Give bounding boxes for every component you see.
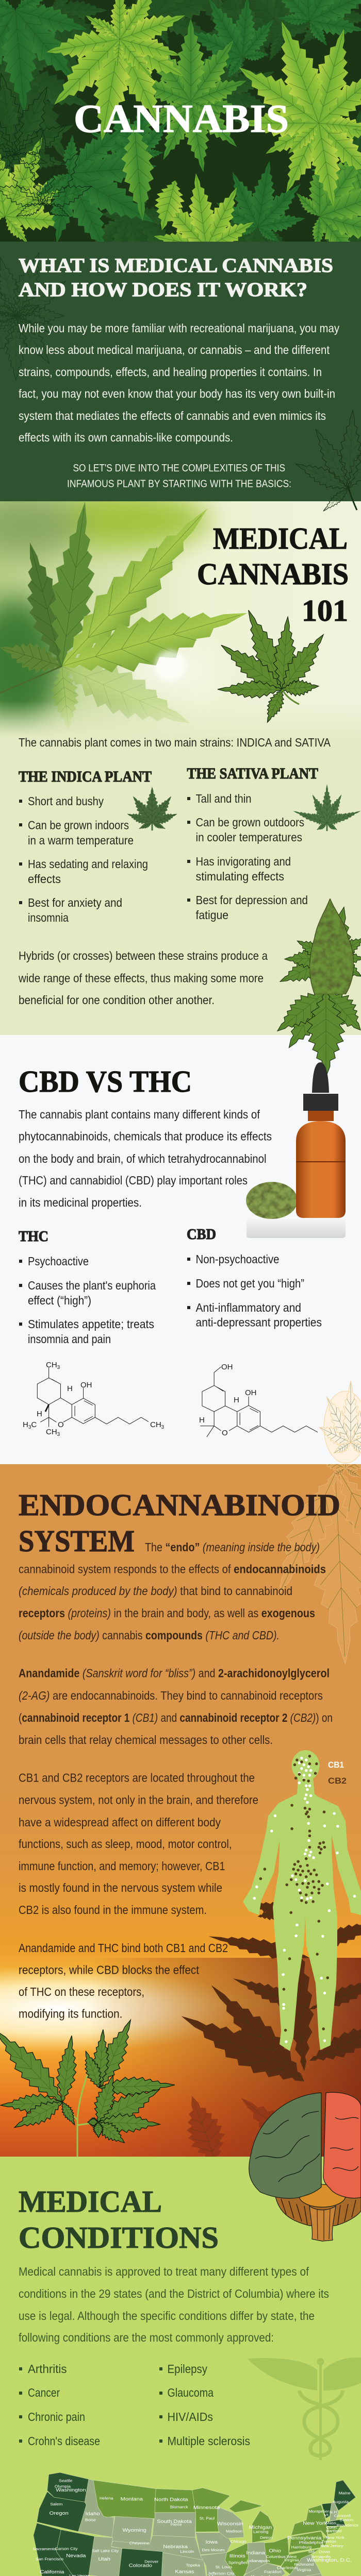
labels: state and city names: Seattle: [59, 2479, 72, 2483]
labels: state and city names: Michigan: [249, 2525, 272, 2530]
panel: hero photo of cannabis leaves: [0, 0, 361, 242]
labels: state and city names: Wyoming: [123, 2528, 146, 2533]
labels: state and city names: Vt.: [324, 2513, 330, 2517]
panel: endocannabinoid system: [0, 1417, 361, 2176]
list: sativa traits: [187, 792, 308, 922]
heading: CBD vs THC: CBD VS THC: [19, 1064, 192, 1098]
image: plant silhouette at sunset: [182, 1902, 361, 2081]
text: two main strains: The cannabis plant comes in two main strains: INDICA and SATIVA: [19, 736, 331, 749]
labels: state and city names: Des Moines: [202, 2548, 225, 2552]
list: common conditions: Cancer: [28, 2386, 60, 2399]
chart: THC molecule: CH: [46, 1361, 57, 1369]
labels: state and city names: Helena: [100, 2496, 113, 2500]
icon: pale bud sketch: [317, 1381, 361, 1463]
labels: state and city names: [32, 2479, 358, 2576]
text block: receptor locations: CB1 and CB2 receptors are located throughout the: [19, 1771, 255, 1785]
labels: state and city names: Montpelier: [309, 2509, 329, 2514]
text block: approved conditions: conditions in the 29 states (and the District of Columbia) where its: [19, 2287, 329, 2300]
list: THC effects: insomnia and pain: [28, 1332, 111, 1346]
labels: state and city names: Boise: [85, 2518, 96, 2522]
chart: THC molecule: CH: [150, 1420, 161, 1429]
panel: medical conditions: [0, 2092, 361, 2576]
labels: state and city names: Harrisburg: [291, 2545, 311, 2549]
text block: phytocannabinoids: in its medicinal properties.: [19, 1196, 142, 1209]
chart: CBD molecule: [199, 1363, 318, 1437]
labels: state and city names: Oregon: [50, 2511, 69, 2516]
text block: phytocannabinoids: on the body and brain, of which tetrahydrocannabinol: [19, 1152, 266, 1165]
text block: receptor locations: immune function, and memory; however, CB1: [19, 1859, 225, 1873]
list: common conditions: Arthritis: [28, 2362, 67, 2376]
labels: state and city names: Kansas: [175, 2569, 194, 2574]
labels: state and city names: Concord: [334, 2514, 351, 2518]
labels: CB1 and CB2: CB2: [328, 1776, 347, 1786]
chart: CBD molecule: H: [199, 1416, 205, 1425]
heading: endocannabinoid system: ENDOCANNABINOID: [19, 1488, 340, 1522]
text block: let's dive in: INFAMOUS PLANT BY STARTING WITH THE BASICS:: [67, 478, 291, 489]
labels: state and city names: San Francisco: [36, 2557, 63, 2561]
labels: state and city names: Topeka: [186, 2563, 200, 2567]
labels: state and city names: Illinois: [229, 2554, 245, 2559]
text block: receptor locations: functions, such as sleep, mood, motor control,: [19, 1837, 232, 1851]
icon: pale bud leaves in orange: [278, 1464, 361, 1665]
labels: state and city names: South Dakota: [157, 2519, 192, 2524]
labels: state and city names: Charleston: [277, 2566, 298, 2570]
text block: receptor locations: is mostly found in the nervous system while: [19, 1881, 222, 1894]
chart: THC molecule: CH: [46, 1428, 57, 1436]
text block: hybrids: Hybrids (or crosses) between these strains produce a: [19, 949, 268, 962]
labels: state and city names: St. Paul: [200, 2516, 215, 2520]
labels: state and city names: Dover: [319, 2550, 331, 2554]
labels: state and city names: Hartford: [326, 2529, 342, 2533]
text block: endo definition: (outside the body) cannabis compounds (THC and CBD).: [19, 1629, 280, 1642]
labels: state and city names: Lansing: [253, 2530, 269, 2534]
chart: THC molecule: H: [37, 1410, 42, 1418]
list: common conditions: Crohn's disease: [28, 2434, 100, 2448]
list: sativa traits: Tall and thin: [196, 792, 252, 805]
labels: state and city names: Chicago: [231, 2539, 247, 2544]
icon: illustrated cannabis bud crossing panel boundary: [269, 899, 361, 1077]
heading: endocannabinoid system: SYSTEM: [19, 1524, 135, 1558]
text block: receptor locations: have a widespread affect on different body: [19, 1816, 221, 1829]
list: CBD effects: Does not get you “high”: [196, 1277, 304, 1290]
labels: state and city names: Providence: [337, 2523, 358, 2528]
labels: state and city names: Iowa: [205, 2540, 218, 2545]
labels: state and city names: New York: [303, 2521, 327, 2526]
text block: introduction: strains, compounds, effects, and healing properties it contains. In: [19, 365, 322, 379]
list: sativa traits: Best for depression and: [196, 893, 308, 907]
text block: THC and CBD binding: Anandamide and THC bind both CB1 and CB2: [19, 1941, 228, 1955]
list: indica traits: Can be grown indoors: [28, 818, 129, 832]
chart: THC molecule: 3: [161, 1425, 165, 1430]
column: THC: [19, 1228, 156, 1346]
icon: sketch leaf top-left of panel: [0, 236, 85, 380]
list: CBD effects: Anti-inflammatory and: [196, 1301, 301, 1314]
labels: state and city names: Boston: [340, 2518, 353, 2522]
chart: THC molecule: C: [31, 1420, 37, 1429]
panel: medical cannabis 101: [0, 410, 361, 1035]
labels: state and city names: Salt Lake City: [92, 2549, 119, 2553]
text block: THC and CBD binding: [19, 1941, 228, 2021]
states: medical only: [77, 2480, 341, 2576]
heading: medical cannabis 101: CANNABIS: [197, 557, 349, 591]
heading: THC: THC: [19, 1228, 48, 1245]
text block: approved conditions: Medical cannabis is approved to treat many different types of: [19, 2265, 309, 2278]
text block: endo definition: The “endo” (meaning inside the body): [145, 1540, 320, 1554]
list: THC effects: effect (“high”): [28, 1294, 91, 1307]
heading: endocannabinoid system: [19, 1488, 340, 1558]
brown dots: CB2: [260, 1805, 327, 2030]
chart: THC molecule: H: [67, 1384, 73, 1393]
labels: state and city names: North Dakota: [154, 2497, 188, 2502]
text block: endo definition: [19, 1540, 326, 1642]
list: common conditions: [19, 2362, 250, 2448]
labels: state and city names: New York: [326, 2536, 344, 2540]
labels: state and city names: Richmond: [294, 2563, 314, 2567]
heading: what is medical cannabis and how does it work: WHAT IS MEDICAL CANNABIS: [19, 255, 333, 277]
labels: state and city names: Springfield: [228, 2561, 249, 2565]
text block: let's dive in: SO LET'S DIVE INTO THE COMPLEXITIES OF THIS: [73, 463, 285, 474]
labels: state and city names: Pierre: [170, 2522, 182, 2527]
labels: state and city names: Montana: [121, 2497, 143, 2502]
text block: introduction: know less about medical marijuana, or cannabis – and the different: [19, 343, 330, 357]
labels: state and city names: Annapolis: [311, 2555, 331, 2559]
text block: THC and CBD binding: modifying its function.: [19, 2007, 123, 2021]
text block: phytocannabinoids: [19, 1108, 272, 1209]
list: CBD effects: anti-depressant properties: [196, 1316, 322, 1329]
labels: state and city names: Denver: [144, 2560, 159, 2564]
icon: brain illustration: [249, 2092, 361, 2241]
labels: state and city names: New Jersey: [320, 2544, 343, 2548]
labels: state and city names: Conn.: [326, 2526, 338, 2530]
chart: THC molecule: 3: [57, 1365, 60, 1370]
labels: state and city names: Salem: [50, 2502, 62, 2506]
list: indica traits: in a warm temperature: [28, 834, 134, 847]
labels: state and city names: Olympia: [55, 2484, 71, 2489]
icon: sativa leaf: [292, 784, 361, 833]
list: indica traits: Short and bushy: [28, 794, 104, 808]
labels: state and city names: Utah: [98, 2557, 110, 2562]
panel: what is medical cannabis: [0, 236, 361, 501]
text block: hybrids: beneficial for one condition other another.: [19, 993, 215, 1007]
list: THC effects: Causes the plant's euphoria: [28, 1279, 156, 1292]
list: sativa traits: fatigue: [196, 908, 228, 922]
heading: the indica plant: THE INDICA PLANT: [19, 768, 152, 785]
labels: state and city names: Indianapolis: [247, 2559, 270, 2563]
list: CBD effects: [187, 1252, 322, 1329]
icon: illustrated leaf: [215, 606, 332, 725]
labels: state and city names: Washington, D.C.: [307, 2558, 352, 2563]
heading: what is medical cannabis and how does it work: AND HOW DOES IT WORK?: [19, 279, 307, 301]
heading: the sativa plant: THE SATIVA PLANT: [187, 765, 318, 782]
labels: state and city names: Colorado: [129, 2563, 152, 2568]
icon: illustrated plant sprig: [0, 2015, 175, 2157]
text block: endo definition: receptors (proteins) in the brain and body, as well as exogenous: [19, 1606, 315, 1620]
labels: state and city names: Ohio: [269, 2549, 281, 2553]
text block: approved conditions: [19, 2265, 329, 2344]
chart: THC molecule: OH: [80, 1381, 92, 1389]
white dots: CB1: [254, 1795, 355, 2042]
list: sativa traits: in cooler temperatures: [196, 831, 302, 844]
icon: indica leaf: [125, 787, 179, 832]
title: CANNABIS: CANNABIS: [74, 96, 289, 141]
labels: state and city names: Augusta: [333, 2500, 349, 2504]
column: the sativa plant: [187, 765, 361, 922]
icon: dark sketch leaves overlapping hero bottom-left: [0, 72, 93, 216]
chart: CBD molecule: OH: [245, 1388, 257, 1397]
text block: phytocannabinoids: phytocannabinoids, chemicals that produce its effects: [19, 1129, 272, 1143]
chart: THC molecule: 3: [28, 1425, 31, 1430]
text block: endo definition: cannabinoid system responds to the effects of endocannabinoids: [19, 1562, 326, 1575]
text block: receptor locations: CB2 is also found in the immune system.: [19, 1903, 207, 1917]
heading: medical cannabis 101: MEDICAL: [213, 521, 348, 555]
text block: receptor locations: [19, 1771, 258, 1917]
text block: THC and CBD binding: receptors, while CBD blocks the effect: [19, 1963, 200, 1976]
labels: state and city names: N.H.: [330, 2510, 338, 2514]
labels: CB1 and CB2: [328, 1760, 347, 1786]
labels: state and city names: Jefferson City: [208, 2571, 234, 2575]
list: THC effects: Psychoactive: [28, 1255, 89, 1268]
labels: state and city names: St. Louis: [215, 2565, 232, 2569]
chart: body with CB1 and CB2 receptor dots: [243, 1750, 361, 2051]
text block: approved conditions: use is legal. Although the specific conditions differ by state, the: [19, 2309, 315, 2323]
text block: anandamide: (cannabinoid receptor 1 (CB1) and cannabinoid receptor 2 (CB2)) on: [19, 1711, 333, 1724]
labels: state and city names: Cheyenne: [129, 2541, 149, 2545]
text block: anandamide: brain cells that relay chemical messages to other cells.: [19, 1733, 273, 1747]
labels: state and city names: Minnesota: [193, 2505, 220, 2511]
list: THC effects: [19, 1255, 156, 1346]
text block: phytocannabinoids: The cannabis plant contains many different kinds of: [19, 1108, 260, 1121]
list: sativa traits: Has invigorating and: [196, 855, 291, 868]
states: neither: [78, 2479, 338, 2576]
labels: state and city names: Trenton: [321, 2539, 336, 2544]
chart: CBD molecule: OH: [221, 1363, 233, 1371]
labels: state and city names: Lincoln: [180, 2550, 194, 2554]
text block: hybrids: wide range of these effects, thus making some more: [18, 972, 264, 985]
icon: dark sketch leaf crossing panel boundary: [292, 410, 361, 514]
heading: medical cannabis 101: 101: [302, 594, 348, 628]
chart: US map of legal cannabis status: [24, 2472, 358, 2576]
icon: caduceus: [248, 2358, 361, 2460]
labels: state and city names: Frankfort: [264, 2570, 282, 2574]
labels: state and city names: Sacramento: [32, 2547, 56, 2551]
labels: state and city names: Mass.: [326, 2521, 337, 2526]
text block: phytocannabinoids: (THC) and cannabidiol (CBD) play important roles: [19, 1174, 248, 1187]
labels: state and city names: West: [287, 2555, 297, 2559]
list: indica traits: effects: [28, 872, 61, 886]
labels: state and city names: Indiana: [246, 2551, 265, 2556]
labels: state and city names: Pennsylvania: [287, 2536, 322, 2541]
labels: state and city names: California: [40, 2570, 64, 2575]
labels: state and city names: Madison: [226, 2529, 242, 2533]
heading: what is medical cannabis and how does it work: [19, 255, 333, 301]
heading: medical cannabis 101: [197, 521, 349, 628]
list: indica traits: Has sedating and relaxing: [28, 857, 148, 871]
heading: medical conditions: MEDICAL: [19, 2184, 162, 2218]
list: CBD effects: Non-psychoactive: [196, 1252, 280, 1266]
labels: state and city names: Nebraska: [163, 2545, 188, 2550]
column: CBD: [187, 1226, 322, 1329]
column: the indica plant: [19, 768, 179, 924]
labels: state and city names: Bismarck: [170, 2505, 188, 2509]
chart: THC molecule: [23, 1361, 165, 1437]
text block: endo definition: (chemicals produced by the body) that bind to cannabinoid: [19, 1584, 292, 1598]
list: indica traits: insomnia: [28, 911, 69, 924]
heading: medical conditions: CONDITIONS: [19, 2221, 219, 2255]
chart: THC molecule: O: [58, 1420, 64, 1429]
labels: state and city names: Md.: [308, 2550, 316, 2554]
list: sativa traits: Can be grown outdoors: [196, 816, 304, 829]
text block: THC and CBD binding: of THC on these receptors,: [19, 1985, 144, 1998]
text block: approved conditions: following conditions are the most commonly approved:: [19, 2331, 274, 2344]
list: indica traits: Best for anxiety and: [28, 896, 122, 909]
heading: medical conditions: [19, 2184, 219, 2255]
labels: state and city names: Idaho: [86, 2512, 100, 2517]
text block: receptor locations: nervous system, not only in the brain, and therefore: [19, 1793, 258, 1806]
list: common conditions: Glaucoma: [167, 2386, 214, 2399]
labels: state and city names: Philadelphia: [299, 2540, 323, 2545]
labels: state and city names: Wisconsin: [217, 2521, 243, 2527]
photo: blurred background with big leaf: [0, 492, 361, 744]
labels: state and city names: Nevada: [66, 2554, 86, 2558]
labels: state and city names: Carson City: [55, 2547, 78, 2551]
panel: CBD vs THC: [0, 899, 361, 1464]
chart: CBD molecule: O: [222, 1429, 228, 1437]
labels: state and city names: Virginia: [297, 2568, 311, 2572]
list: common conditions: Chronic pain: [28, 2410, 85, 2424]
text block: introduction: [19, 321, 339, 444]
text block: introduction: effects with its own cannabis-like compounds.: [19, 431, 233, 444]
text block: anandamide: (2-AG) are endocannabinoids. They bind to cannabinoid receptors: [19, 1689, 323, 1702]
text block: anandamide: Anandamide (Sanskrit word for “bliss”) and 2-arachidonoylglycerol: [19, 1666, 330, 1680]
list: common conditions: Epilepsy: [167, 2362, 207, 2376]
image: oil bottle with bud: [246, 1062, 346, 1238]
labels: state and city names: Maine: [339, 2491, 351, 2495]
states: recreational and medical: [24, 2472, 356, 2576]
labels: CB1 and CB2: CB1: [328, 1760, 344, 1770]
heading: CBD: CBD: [187, 1226, 216, 1243]
list: sativa traits: stimulating effects: [196, 870, 284, 883]
list: indica traits: [19, 794, 148, 924]
list: common conditions: HIV/AIDs: [167, 2410, 213, 2424]
text block: anandamide: [19, 1666, 333, 1747]
text block: hybrids: [18, 949, 268, 1007]
labels: state and city names: Columbus: [266, 2555, 286, 2559]
chart: THC molecule: H: [23, 1420, 28, 1429]
text block: introduction: system that mediates the effects of cannabis and even mimics its: [19, 409, 326, 422]
chart: THC molecule: 3: [57, 1432, 60, 1437]
labels: state and city names: Detroit: [260, 2536, 273, 2540]
chart: CBD molecule: H: [234, 1396, 239, 1404]
list: common conditions: Multiple sclerosis: [167, 2434, 250, 2448]
labels: state and city names: Virginia: [285, 2558, 299, 2562]
labels: state and city names: Washington: [56, 2488, 86, 2493]
text block: let's dive in: [67, 463, 291, 489]
list: THC effects: Stimulates appetite; treats: [28, 1317, 154, 1331]
